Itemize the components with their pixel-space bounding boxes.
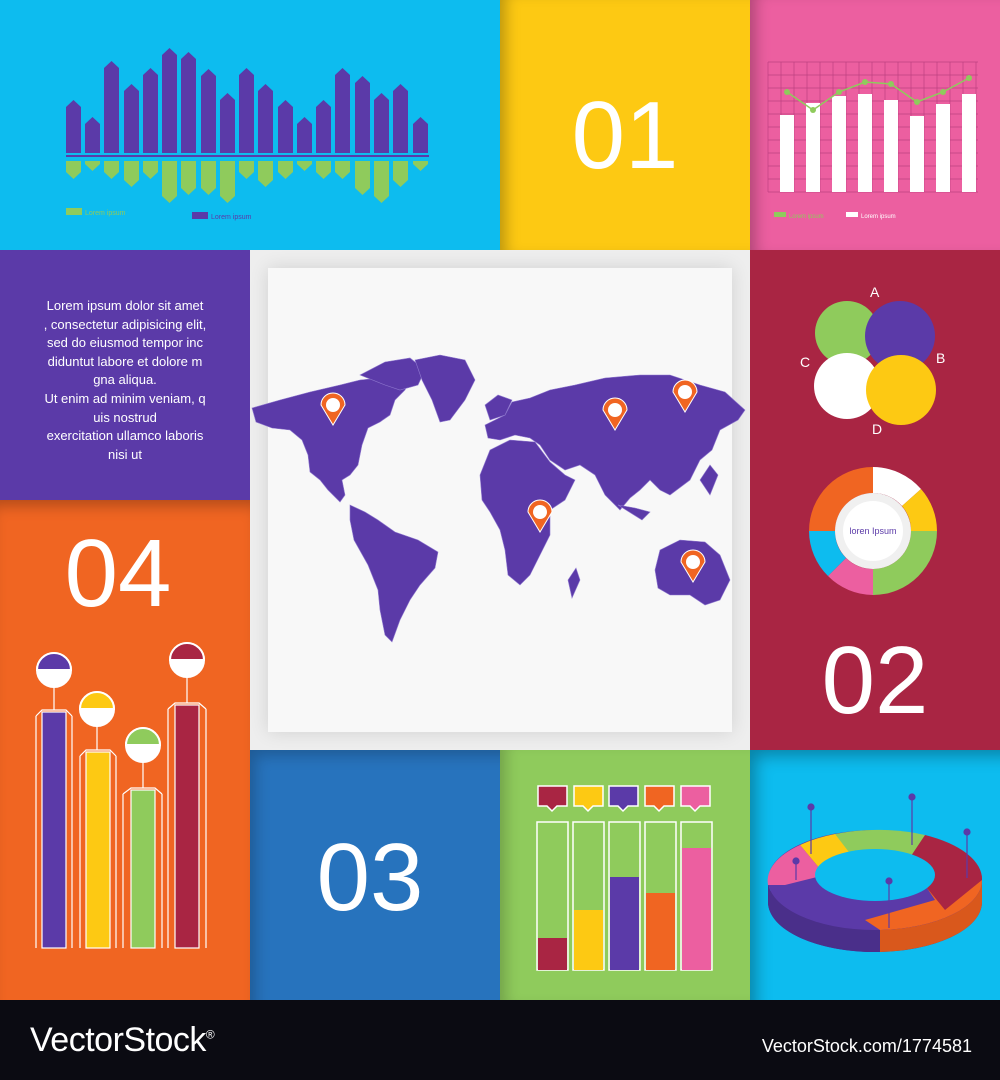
number 04: 04 bbox=[65, 520, 171, 627]
donut chart bbox=[809, 467, 937, 595]
text block: sed do eiusmod tempor inc bbox=[47, 335, 203, 350]
text block: exercitation ullamco laboris bbox=[47, 428, 203, 443]
venn diagram bbox=[800, 284, 945, 437]
markers bbox=[37, 643, 204, 762]
text block: , consectetur adipisicing elit, bbox=[44, 317, 206, 332]
3D ring chart bbox=[768, 830, 982, 952]
venn diagram: B bbox=[936, 350, 945, 366]
url: VectorStock.com/1774581 bbox=[762, 1036, 972, 1056]
footer bbox=[0, 1000, 1000, 1080]
columns bbox=[537, 822, 712, 970]
legend bbox=[66, 208, 252, 221]
pins bbox=[793, 794, 970, 928]
venn diagram: A bbox=[870, 284, 880, 300]
panel: crimson venn and donut bbox=[750, 250, 1000, 750]
panel: yellow 01 bbox=[500, 0, 750, 250]
panel: blue 03 bbox=[250, 750, 500, 1000]
text block: Ut enim ad minim veniam, q bbox=[44, 391, 206, 406]
map continents bbox=[252, 355, 745, 642]
number 02: 02 bbox=[822, 627, 928, 734]
panel: pink line chart: Lorem ipsum bbox=[861, 214, 896, 220]
bar chart: purple and green bbox=[66, 48, 429, 203]
text block: Lorem ipsum dolor sit amet bbox=[47, 298, 203, 313]
line bbox=[787, 78, 969, 110]
venn diagram: D bbox=[872, 421, 882, 437]
panel: world map bbox=[250, 250, 750, 750]
number 01: 01 bbox=[572, 82, 678, 189]
text block: diduntut labore et dolore m bbox=[48, 354, 202, 369]
panel: green stacked columns bbox=[500, 750, 750, 1000]
panel: cyan top bar chart bbox=[0, 0, 500, 250]
number 03: 03 bbox=[317, 824, 423, 931]
bars bbox=[780, 94, 976, 192]
donut chart: loren Ipsum bbox=[849, 526, 897, 536]
text block: nisi ut bbox=[108, 447, 142, 462]
text block bbox=[44, 298, 206, 462]
legend: Lorem ipsum bbox=[211, 214, 252, 221]
tags bbox=[538, 786, 710, 811]
logo: VectorStock® bbox=[30, 1021, 214, 1059]
venn diagram: C bbox=[800, 354, 810, 370]
panel: purple text bbox=[0, 250, 250, 500]
legend: Lorem ipsum bbox=[85, 210, 126, 217]
panel: pink line chart: Lorem ipsum bbox=[789, 214, 824, 220]
panel: orange 04 cylinders bbox=[0, 500, 250, 1000]
text block: gna aliqua. bbox=[93, 372, 157, 387]
panel: cyan 3D ring bbox=[750, 750, 1000, 1000]
panel: pink line chart bbox=[750, 0, 1000, 250]
text block: uis nostrud bbox=[93, 410, 157, 425]
map pins bbox=[321, 380, 705, 582]
cylinder bars bbox=[36, 677, 206, 948]
